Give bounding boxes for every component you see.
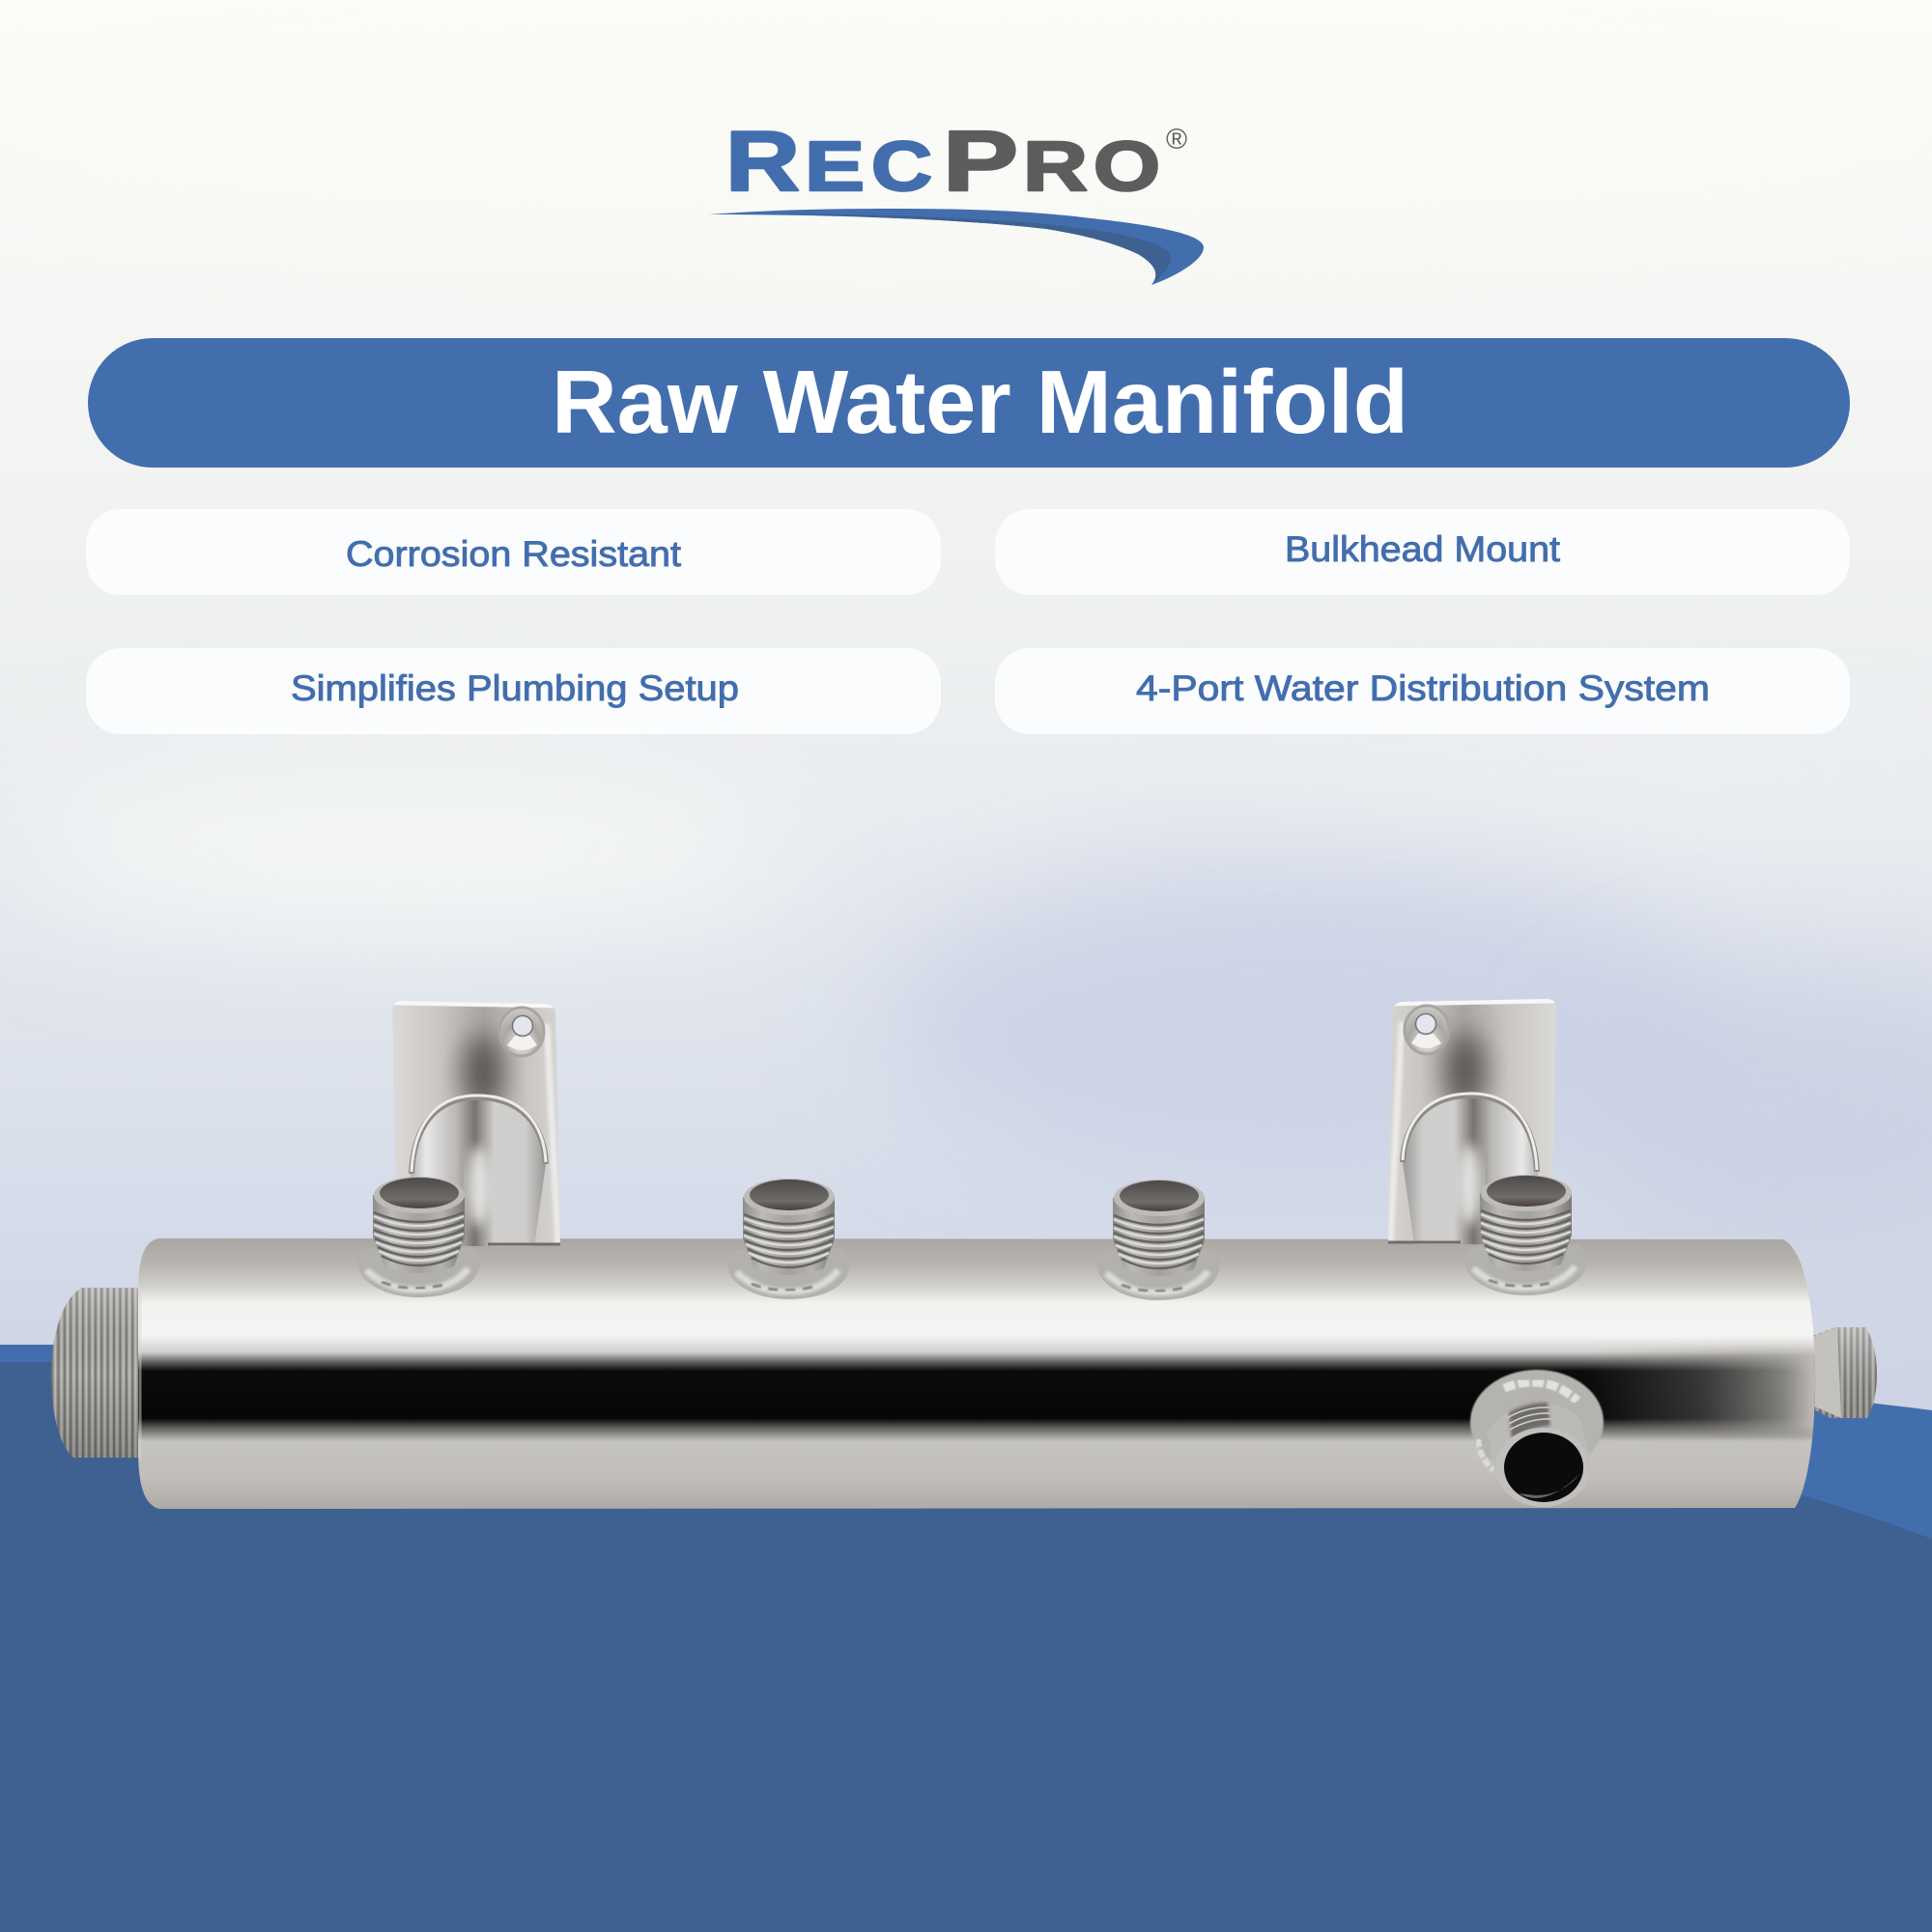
top port 2	[727, 1179, 850, 1299]
right mounting bracket	[1388, 999, 1556, 1244]
logo: RecPro: R	[725, 113, 800, 209]
feature chip: Corrosion Resistant	[86, 509, 941, 595]
logo: RecPro	[709, 113, 1204, 285]
left mounting bracket	[392, 1001, 560, 1246]
feature chip: Simplifies Plumbing Setup	[86, 648, 941, 734]
front facing port	[1470, 1370, 1604, 1507]
top port 3	[1097, 1179, 1220, 1300]
top port 4	[1464, 1175, 1587, 1295]
feature chip: 4-Port Water Distribution System	[995, 648, 1850, 734]
feature chip: Bulkhead Mount	[995, 509, 1850, 595]
feature chip: Simplifies Plumbing Setup: Simplifies Plumbing Setup	[291, 668, 739, 708]
logo swoosh	[709, 209, 1204, 285]
title banner	[88, 338, 1850, 468]
product: stainless steel manifold	[51, 999, 1877, 1509]
small right threaded end	[1806, 1327, 1877, 1418]
logo: RecPro: O	[1094, 128, 1160, 206]
top port 1	[357, 1177, 480, 1297]
dark blue ground	[0, 1362, 1932, 1932]
logo: RecPro: R	[1023, 128, 1088, 206]
main cylinder body	[138, 1238, 1826, 1509]
logo: RecPro: P	[943, 113, 1018, 209]
feature chip: 4-Port Water Distribution System: 4-Port Water Distribution System	[1136, 668, 1710, 708]
logo: RecPro: E	[805, 128, 865, 206]
large left threaded end	[51, 1288, 145, 1458]
logo: RecPro: C	[871, 128, 932, 206]
title banner: Raw Water Manifold	[552, 352, 1408, 452]
logo: RecPro: ®	[1166, 124, 1187, 156]
light blue wave band	[0, 1345, 1932, 1932]
feature chip: Corrosion Resistant: Corrosion Resistant	[346, 534, 682, 574]
feature chip: Bulkhead Mount: Bulkhead Mount	[1285, 529, 1561, 569]
